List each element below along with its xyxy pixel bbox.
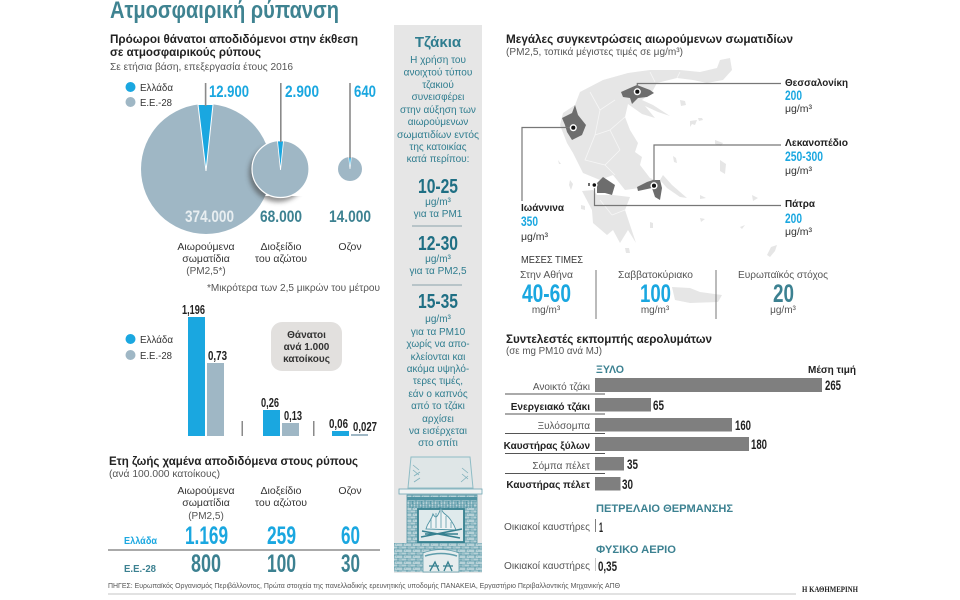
- label: Thessaloniki: [785, 78, 848, 115]
- label: Thessaloniki: 200: [785, 87, 802, 103]
- bar values: 0,027: [353, 419, 377, 434]
- EU death values: 14.000: [329, 207, 371, 226]
- bar values: 35: [627, 456, 638, 472]
- label: Patras: 200: [785, 210, 802, 226]
- subheading: (ανά 100.000 κατοίκους): [109, 468, 220, 480]
- heading: Ετη ζωής χαμένα αποδιδόμενα στους ρύπους: [109, 454, 358, 468]
- bar values: 160: [735, 417, 751, 433]
- category: heating oil: ΠΕΤΡΕΛΑΙΟ ΘΕΡΜΑΝΣΗΣ: [596, 503, 733, 515]
- panel: deaths per 1000 bar chart: [126, 302, 377, 436]
- panel: average values: [520, 254, 828, 319]
- stat: weekend: mg/m³: [641, 305, 670, 316]
- column header: mean value: Μέση τιμή: [808, 365, 856, 376]
- bar values: 0,26: [261, 395, 279, 410]
- row: EU-28: [124, 550, 360, 578]
- row labels: Καυστήρας ξύλων: [504, 441, 590, 452]
- subheading: (PM2,5, τοπικά μέγιστες τιμές σε μg/m³): [506, 46, 683, 58]
- bubble: particulate matter: [141, 83, 271, 234]
- panel: concentrations map: [506, 32, 848, 303]
- stat: PM1: [414, 176, 463, 220]
- legend: Ε.Ε.-28: [140, 97, 172, 109]
- heading second line: σε ατμοσφαιρικούς ρύπους: [110, 45, 261, 59]
- sidebar intro text: της κατοικίας: [409, 141, 467, 153]
- row: Greece: 60: [341, 522, 360, 550]
- Greece death values: 2.900: [285, 82, 319, 101]
- stat: PM2.5: μg/m³: [425, 254, 452, 265]
- footnote: *Μικρότερα των 2,5 μικρών του μέτρου: [207, 282, 380, 294]
- pollutant labels: [177, 241, 362, 277]
- sidebar intro text: [397, 54, 479, 165]
- leader lines: [522, 84, 781, 206]
- column headers: Αιωρούμενα: [177, 485, 235, 497]
- Greece death values: 640: [354, 82, 376, 101]
- stat: PM10: κλείονται και: [411, 351, 465, 363]
- location markers: [570, 89, 657, 188]
- stat: PM10: για τα PM10: [411, 327, 466, 338]
- icon: fireplace: [394, 457, 482, 572]
- stat: weekend: 100: [640, 280, 671, 308]
- column headers: (PM2,5): [188, 511, 224, 522]
- panel: fireplace sidebar: [394, 25, 482, 573]
- stat: Athens: mg/m³: [532, 305, 561, 316]
- row labels: Ξυλόσομπα: [538, 420, 590, 432]
- stat: PM10: τερες τιμές,: [413, 375, 463, 387]
- sidebar title: Τζάκια: [415, 34, 462, 51]
- legend: Ελλάδα: [140, 334, 173, 346]
- row labels: [504, 381, 591, 491]
- row: EU-28: 100: [267, 550, 296, 578]
- stat: Athens: [520, 269, 573, 316]
- label: Ioannina: Ιωάννινα: [521, 203, 565, 214]
- sidebar intro text: ανοιχτού τύπου: [404, 66, 472, 78]
- column headers: σωματίδια: [182, 497, 230, 509]
- stat: PM10: [406, 291, 470, 449]
- stat: PM10: να εισέρχεται: [409, 425, 467, 437]
- row: natural gas boilers: [504, 558, 617, 574]
- category: natural gas: ΦΥΣΙΚΟ ΑΕΡΙΟ: [596, 544, 676, 556]
- bars: [595, 378, 822, 490]
- stat: PM2.5: για τα PM2,5: [409, 266, 467, 277]
- stat: PM10: μg/m³: [425, 314, 452, 325]
- bar values: 1,196: [182, 302, 205, 317]
- panel: premature deaths bubbles: [110, 32, 380, 294]
- legend: Ελλάδα: [140, 82, 173, 94]
- label: Attica basin: Λεκανοπέδιο: [785, 138, 848, 149]
- row: EU-28: 30: [341, 550, 360, 578]
- row: Greece: 259: [267, 522, 296, 550]
- row: heating oil boilers: [504, 519, 603, 535]
- pollutant labels: Διοξείδιο: [261, 241, 302, 253]
- sidebar intro text: σωματιδίων εντός: [397, 129, 479, 141]
- sidebar intro text: συνεισφέρει: [412, 91, 464, 103]
- category: wood: ΞΥΛΟ: [596, 364, 624, 376]
- source note: ΠΗΓΕΣ: Ευρωπαϊκός Οργανισμός Περιβάλλοντος, Πρώτα στοιχεία της πανελλαδικής ερευνητικής υποδομής ΠΑΝΑΚΕΙΑ, Εργαστήριο Περιβαλλοντικής Μηχανικής ΑΠΘ: [108, 582, 621, 590]
- stat: PM10: εάν ο καπνός: [408, 388, 468, 400]
- callout: deaths per 1000 inhabitants: Θάνατοι: [287, 330, 326, 341]
- callout: deaths per 1000 inhabitants: κατοίκους: [283, 354, 330, 365]
- sidebar intro text: τζακιού: [422, 79, 454, 91]
- Greece death values: 12.900: [209, 82, 249, 101]
- stat: weekend: [618, 269, 693, 316]
- pollutant labels: Αιωρούμενα: [177, 241, 235, 253]
- stat: PM10: ακόμα υψηλό-: [407, 363, 469, 375]
- pollutant labels: του αζώτου: [255, 253, 307, 265]
- column headers: του αζώτου: [255, 497, 307, 509]
- stat: PM10: από το τζάκι: [411, 400, 465, 412]
- row: EU-28: Ε.Ε.-28: [124, 564, 156, 575]
- sidebar intro text: κατά περίπου:: [407, 153, 469, 165]
- stat: PM2.5: [409, 233, 467, 277]
- row: natural gas boilers: Οικιακοί καυστήρες: [504, 560, 590, 572]
- stat: PM10: χωρίς να απο-: [406, 338, 470, 350]
- stat: PM1: για τα PM1: [414, 209, 463, 220]
- legend: Ε.Ε.-28: [140, 350, 172, 362]
- callout: deaths per 1000 inhabitants: [271, 322, 342, 371]
- heading: Μεγάλες συγκεντρώσεις αιωρούμενων σωματιδίων: [506, 32, 793, 46]
- label: Patras: [785, 199, 816, 238]
- highlighted regions: [562, 85, 662, 200]
- sidebar intro text: Η χρήση του: [410, 54, 466, 66]
- row: natural gas boilers: 0,35: [598, 558, 617, 574]
- row: heating oil boilers: 1: [599, 519, 603, 535]
- panel: years of life lost table: [108, 454, 380, 578]
- callout: deaths per 1000 inhabitants: ανά 1.000: [284, 342, 330, 353]
- row separators: [505, 394, 605, 474]
- pollutant labels: σωματίδια: [182, 253, 230, 265]
- row labels: Σόμπα πέλετ: [532, 460, 590, 472]
- row: Greece: [124, 522, 360, 550]
- stat: PM10: αρχίσει: [422, 413, 454, 425]
- sidebar intro text: αιωρούμενων: [408, 116, 468, 128]
- stat: European target: [738, 269, 828, 316]
- stat: PM1: μg/m³: [425, 197, 452, 208]
- row labels: Ανοικτό τζάκι: [533, 381, 590, 393]
- stat: European target: 20: [773, 280, 794, 308]
- legend: [126, 82, 173, 109]
- bar values: 65: [653, 397, 664, 413]
- row: Greece: Ελλάδα: [124, 536, 158, 547]
- row: heating oil boilers: Οικιακοί καυστήρες: [504, 521, 590, 533]
- sidebar intro text: στην αύξηση των: [400, 104, 476, 116]
- row labels: Ενεργειακό τζάκι: [511, 402, 590, 413]
- bar values: 0,73: [208, 348, 227, 363]
- average values label: ΜΕΣΕΣ ΤΙΜΕΣ: [521, 254, 583, 266]
- stat: PM1: 10-25: [418, 176, 458, 198]
- label: Ioannina: [521, 203, 565, 243]
- stat: weekend: Σαββατοκύριακο: [618, 269, 693, 281]
- legend: [126, 334, 173, 362]
- row labels: Καυστήρας πέλετ: [506, 480, 591, 491]
- map of Greece: [558, 58, 777, 303]
- EU death values: 374.000: [185, 207, 234, 226]
- bar values: [182, 302, 377, 434]
- stat: Athens: 40-60: [522, 280, 571, 308]
- label: Thessaloniki: Θεσσαλονίκη: [785, 78, 848, 89]
- stat: PM10: στο σπίτι: [418, 437, 458, 449]
- stat: PM2.5: 12-30: [418, 233, 458, 255]
- label: Attica basin: μg/m³: [785, 165, 813, 177]
- bar values: [622, 377, 841, 492]
- panel: emission factors chart: [504, 332, 856, 574]
- subheading: (σε mg PM10 ανά MJ): [506, 345, 602, 357]
- heading: Συντελεστές εκπομπής αερολυμάτων: [506, 332, 712, 346]
- stat: European target: Ευρωπαϊκός στόχος: [738, 269, 828, 281]
- bar values: 0,06: [329, 416, 348, 431]
- bar values: 0,13: [284, 408, 302, 423]
- column headers: Οζον: [338, 485, 362, 497]
- bubble: nitrogen dioxide: [249, 83, 309, 202]
- bars: [188, 317, 368, 436]
- label: Patras: Πάτρα: [785, 199, 816, 210]
- EU death values: [185, 207, 371, 226]
- label: Thessaloniki: μg/m³: [785, 103, 813, 115]
- bar values: 265: [825, 377, 841, 393]
- column headers: [177, 485, 362, 522]
- bar values: 30: [622, 476, 633, 492]
- stat: European target: μg/m³: [770, 305, 797, 316]
- bar values: 180: [751, 436, 767, 452]
- stat: PM10: 15-35: [418, 291, 458, 313]
- publisher logo: Η ΚΑΘΗΜΕΡΙΝΗ: [802, 585, 859, 594]
- Greece death values: [209, 82, 376, 101]
- heading: premature deaths: Πρόωροι θάνατοι αποδιδόμενοι στην έκθεση: [110, 32, 358, 46]
- stat: Athens: Στην Αθήνα: [520, 269, 573, 281]
- label: Patras: μg/m³: [785, 226, 813, 238]
- subheading: Σε ετήσια βάση, επεξεργασία έτους 2016: [110, 61, 293, 73]
- label: Ioannina: 350: [521, 213, 538, 229]
- label: Attica basin: 250-300: [785, 148, 823, 164]
- pollutant labels: Οζον: [338, 241, 362, 253]
- label: Attica basin: [785, 138, 848, 177]
- column headers: Διοξείδιο: [261, 485, 302, 497]
- pollutant labels: (PM2,5*): [186, 266, 226, 277]
- row: Greece: 1.169: [185, 522, 228, 550]
- row: EU-28: 800: [191, 550, 221, 578]
- label: Ioannina: μg/m³: [521, 231, 549, 243]
- bubble: ozone: [338, 83, 362, 181]
- EU death values: 68.000: [260, 207, 302, 226]
